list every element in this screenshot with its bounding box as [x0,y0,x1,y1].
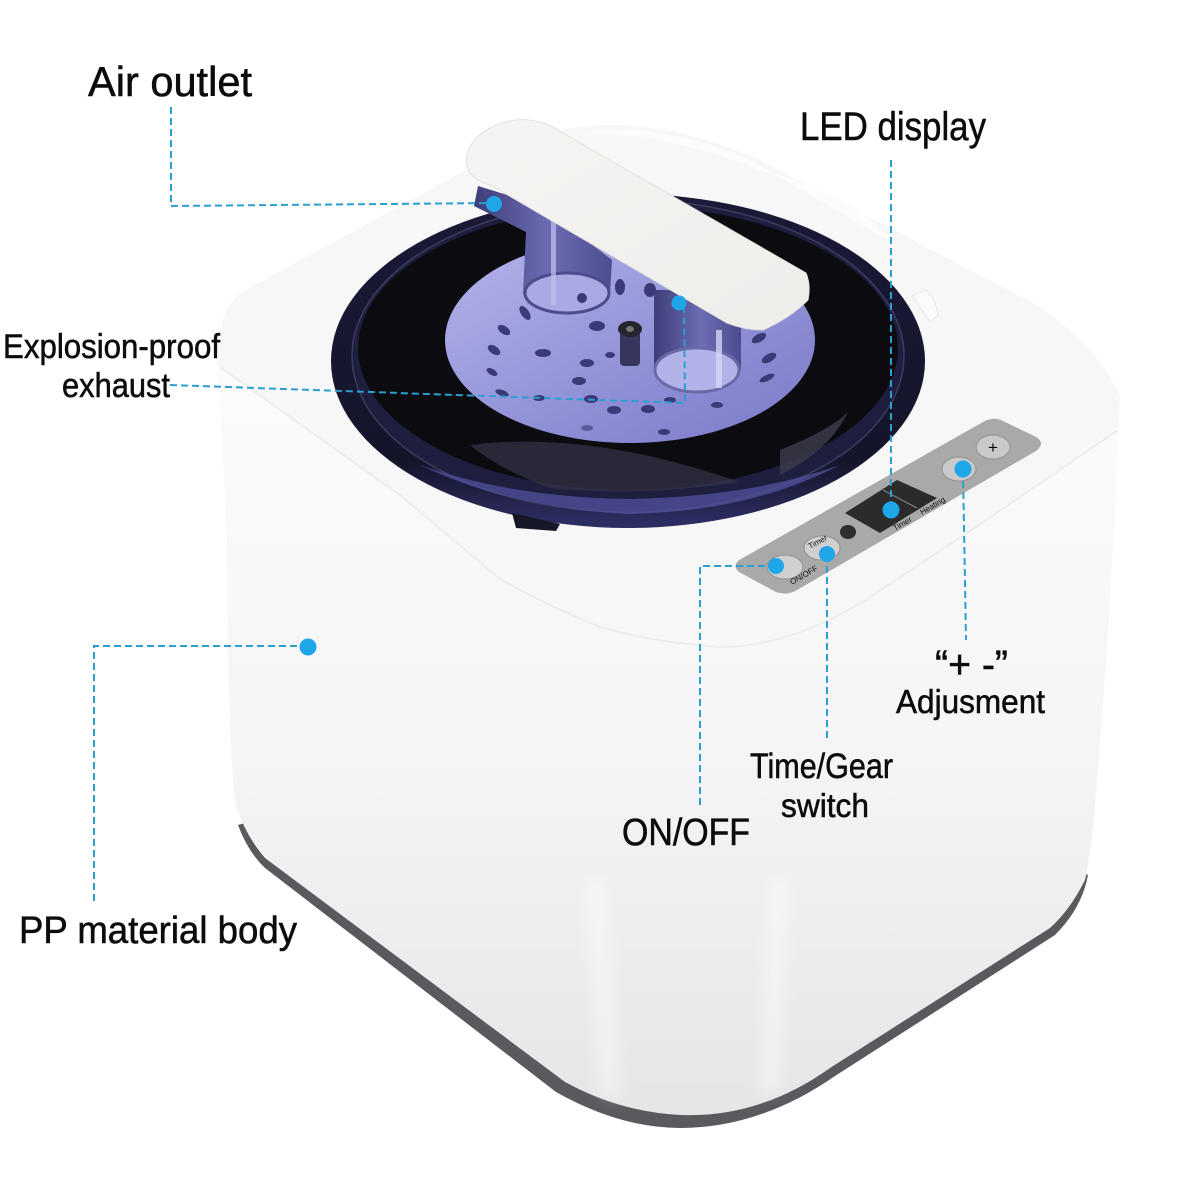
back rim highlight [575,130,893,243]
LED screen [845,480,937,533]
sensor [840,525,856,539]
lid tab [912,290,938,322]
callout: time gear switch [750,546,893,824]
callout: PP material body [19,638,316,952]
callout: time gear switch: Time/Gear [750,747,893,786]
center valve [618,321,642,366]
perforated disk [445,237,815,443]
power button [767,555,803,579]
panel labels: Timer [892,515,914,533]
callout: air outlet [88,58,502,212]
callout: LED display: LED display [800,105,986,149]
lid latch [512,513,560,531]
left tube [474,186,612,313]
panel plate [735,419,1041,594]
panel labels: Heating [918,495,947,517]
callout: plus minus adjustment [896,460,1045,720]
panel labels [788,495,947,587]
lid glare [780,412,848,475]
lid interior [358,206,898,490]
panel labels: ON/OFF [788,564,819,587]
top handle [466,120,809,330]
callout: on off [622,558,784,854]
time gear button [804,533,840,560]
right tube [654,290,741,392]
lid rim reflection [420,465,840,514]
front reflections [585,880,788,1100]
lid [331,120,925,531]
callout: time gear switch: switch [781,787,869,824]
body shell [218,125,1120,1115]
callout: PP material body: PP material body [19,910,297,952]
front edge highlight [220,367,1118,647]
lid glass ring [352,200,904,512]
callout: explosion-proof exhaust: Explosion-proof [3,328,220,366]
callout: plus minus adjustment: “+ -” [935,643,1008,687]
callout: on off: ON/OFF [622,812,750,854]
callout: LED display [800,105,986,518]
plus button: + [988,438,998,457]
callout: plus minus adjustment: Adjusment [896,683,1045,720]
plus button [976,435,1010,459]
callout: air outlet: Air outlet [88,58,252,105]
callout: explosion-proof exhaust [3,296,686,405]
top surface [218,125,1120,645]
time gear button: Timer [807,533,829,551]
control panel [735,419,1041,594]
minus button [942,457,976,481]
callout: explosion-proof exhaust: exhaust [62,367,170,405]
device body [218,125,1120,1128]
lid rim [331,194,925,528]
base strip [238,700,1088,1128]
